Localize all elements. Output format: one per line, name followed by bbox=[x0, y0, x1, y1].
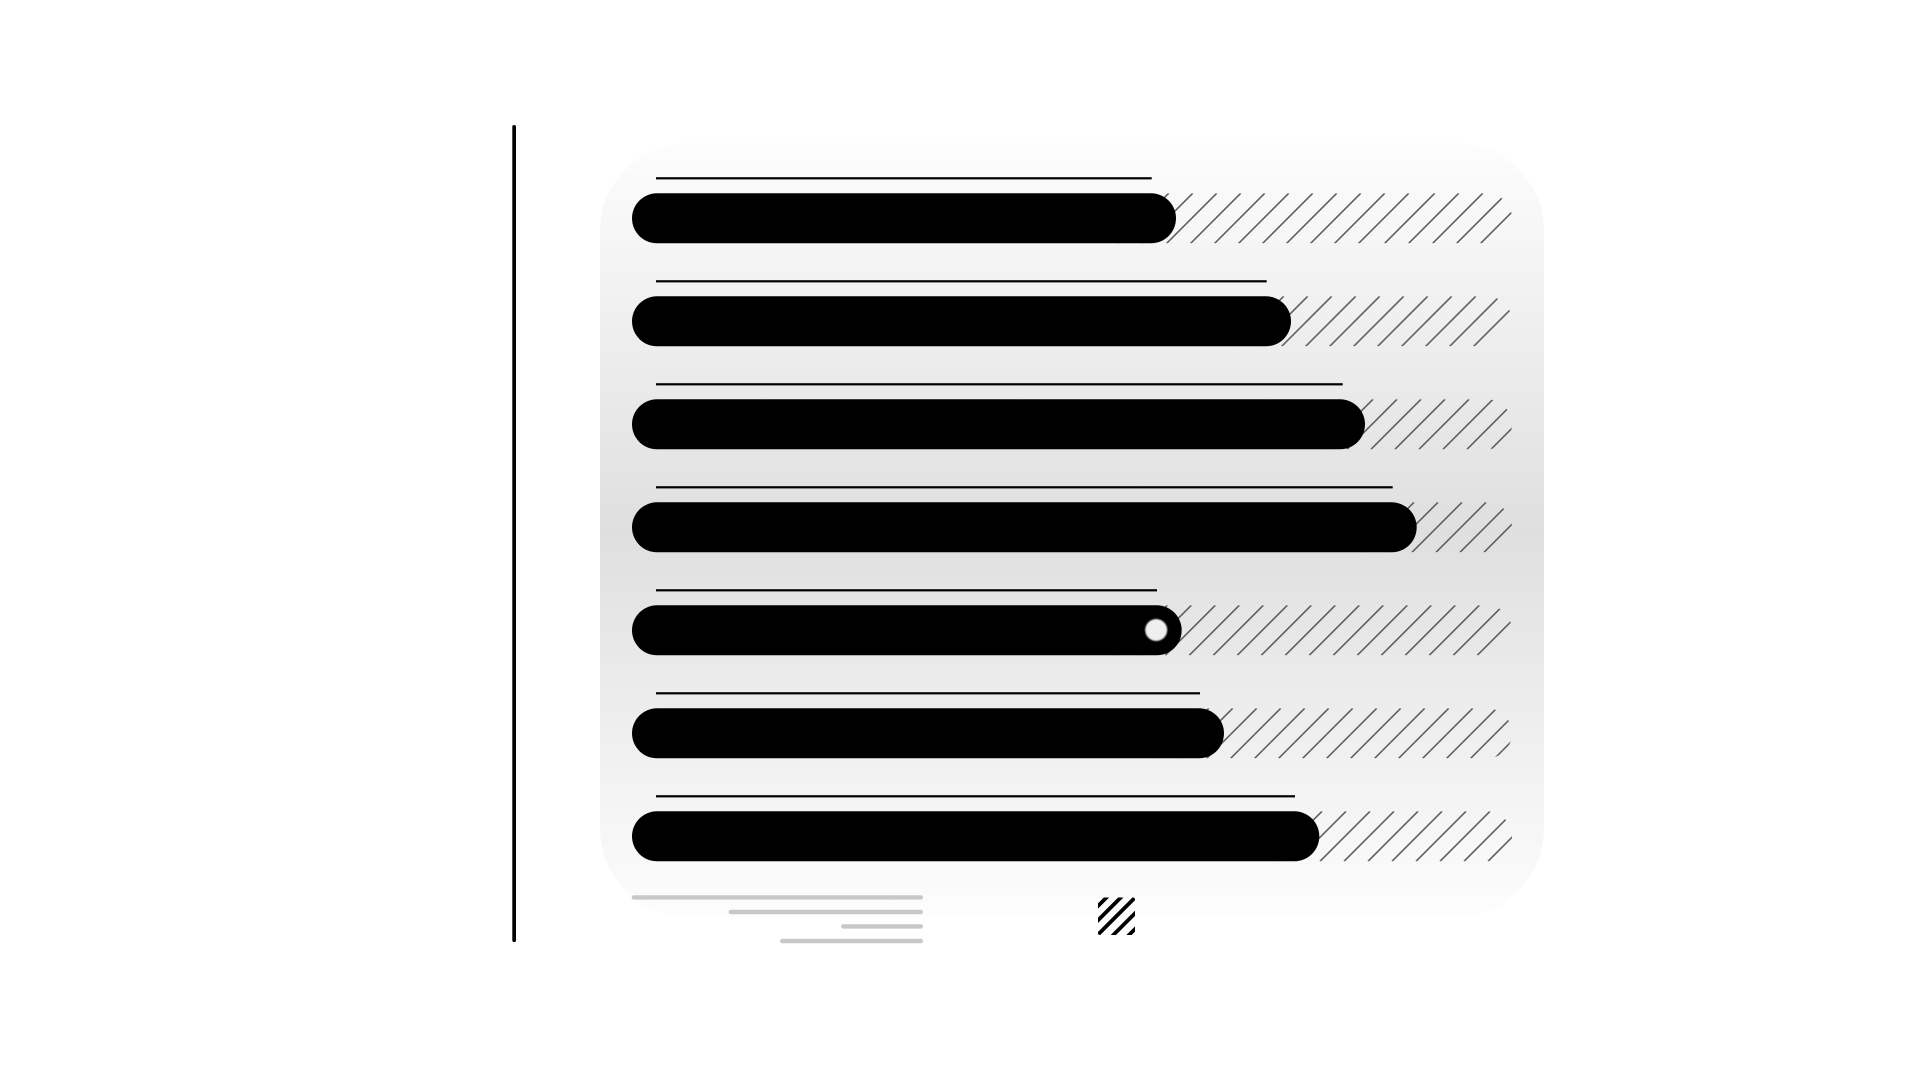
filled bar 7 bbox=[632, 811, 1319, 861]
label line 4 bbox=[656, 486, 1393, 488]
row 7 bbox=[632, 795, 1538, 861]
filled bar 6 bbox=[632, 708, 1224, 758]
hatched remainder 3 bbox=[1323, 399, 1512, 450]
row 5 bbox=[632, 589, 1527, 655]
hatched remainder 4 bbox=[1364, 502, 1512, 552]
axis line bbox=[512, 125, 516, 942]
hatched remainder 2 bbox=[1234, 296, 1524, 346]
filled bar 2 bbox=[632, 296, 1291, 346]
hatched remainder 1 bbox=[1119, 193, 1531, 243]
filled bar 5 bbox=[632, 605, 1182, 655]
footnote lines bbox=[632, 895, 923, 943]
filled bar 3 bbox=[632, 399, 1365, 449]
row 1 bbox=[632, 177, 1531, 243]
label line 5 bbox=[656, 589, 1157, 591]
label line 6 bbox=[656, 692, 1200, 694]
row 2 bbox=[632, 280, 1524, 346]
hatched remainder 5 bbox=[1117, 605, 1527, 655]
label line 2 bbox=[656, 280, 1267, 282]
label line 1 bbox=[656, 177, 1152, 179]
hatched remainder 6 bbox=[1159, 708, 1545, 758]
hatched remainder 7 bbox=[1272, 811, 1538, 861]
marker dot bbox=[1145, 619, 1167, 641]
row 3 bbox=[632, 383, 1541, 449]
legend swatch: hatch bbox=[1098, 898, 1135, 935]
row 4 bbox=[632, 486, 1534, 552]
filled bar 1 bbox=[632, 193, 1176, 243]
filled bar 4 bbox=[632, 502, 1417, 552]
row 6 bbox=[632, 692, 1545, 758]
infographic canvas bbox=[512, 125, 1544, 944]
panel: gradient background bbox=[600, 143, 1544, 917]
label line 3 bbox=[656, 383, 1343, 385]
label line 7 bbox=[656, 795, 1295, 797]
